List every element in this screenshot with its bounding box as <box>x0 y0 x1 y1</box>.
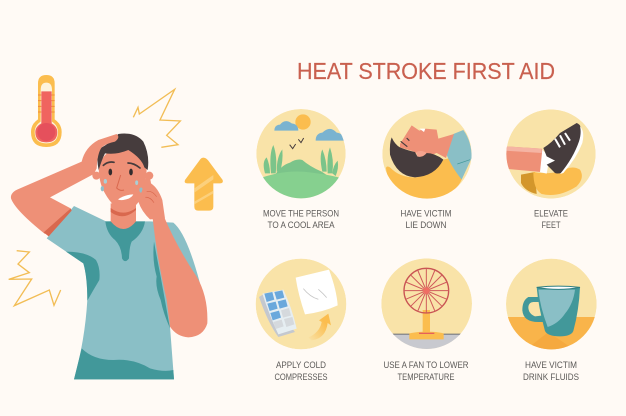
label: cold compresses: APPLY COLD <box>276 360 326 370</box>
eyes <box>108 169 112 175</box>
label: lie down <box>400 208 452 230</box>
label: drink fluids: HAVE VICTIM <box>525 360 577 370</box>
hand on head <box>82 134 118 175</box>
label: use a fan <box>384 360 469 382</box>
icon: electric fan <box>378 258 475 351</box>
tears <box>104 179 107 184</box>
icon: lightning burst top <box>133 89 180 147</box>
icon: thermometer <box>31 75 62 147</box>
label: elevate feet: ELEVATE <box>534 208 568 218</box>
t-shirt <box>47 206 200 379</box>
label: cold compresses: COMPRESSES <box>274 372 328 382</box>
label: use a fan: USE A FAN TO LOWER <box>384 360 469 370</box>
label: elevate feet <box>534 208 568 230</box>
icon: victim lying down <box>382 109 472 200</box>
neck <box>111 203 136 229</box>
illustration: sweating man and heat symbols <box>9 75 223 379</box>
mouth <box>118 194 133 200</box>
icon: cold compresses <box>256 259 346 349</box>
title: HEAT STROKE FIRST AID <box>297 58 555 84</box>
label: cold compresses <box>274 360 328 382</box>
icon: up arrow <box>185 158 223 211</box>
nose <box>117 175 124 190</box>
icon: elevated feet <box>505 109 596 199</box>
icon: cool area landscape <box>255 109 348 200</box>
label: move the person: TO A COOL AREA <box>268 220 334 230</box>
label: move the person: MOVE THE PERSON <box>263 208 339 218</box>
eyebrows <box>103 162 140 168</box>
label: drink fluids <box>523 360 579 382</box>
label: lie down: HAVE VICTIM <box>400 208 452 218</box>
right arm and hand on cheek <box>138 175 207 337</box>
head <box>92 134 153 212</box>
raised arm <box>11 162 95 236</box>
label: drink fluids: DRINK FLUIDS <box>523 372 579 382</box>
icon: cup of fluids <box>505 259 598 350</box>
icon: lightning burst bottom <box>9 251 61 306</box>
label: elevate feet: FEET <box>542 220 561 230</box>
label: use a fan: TEMPERATURE <box>398 372 454 382</box>
label: move the person <box>263 208 339 230</box>
label: lie down: LIE DOWN <box>406 220 446 230</box>
hair <box>97 134 148 170</box>
